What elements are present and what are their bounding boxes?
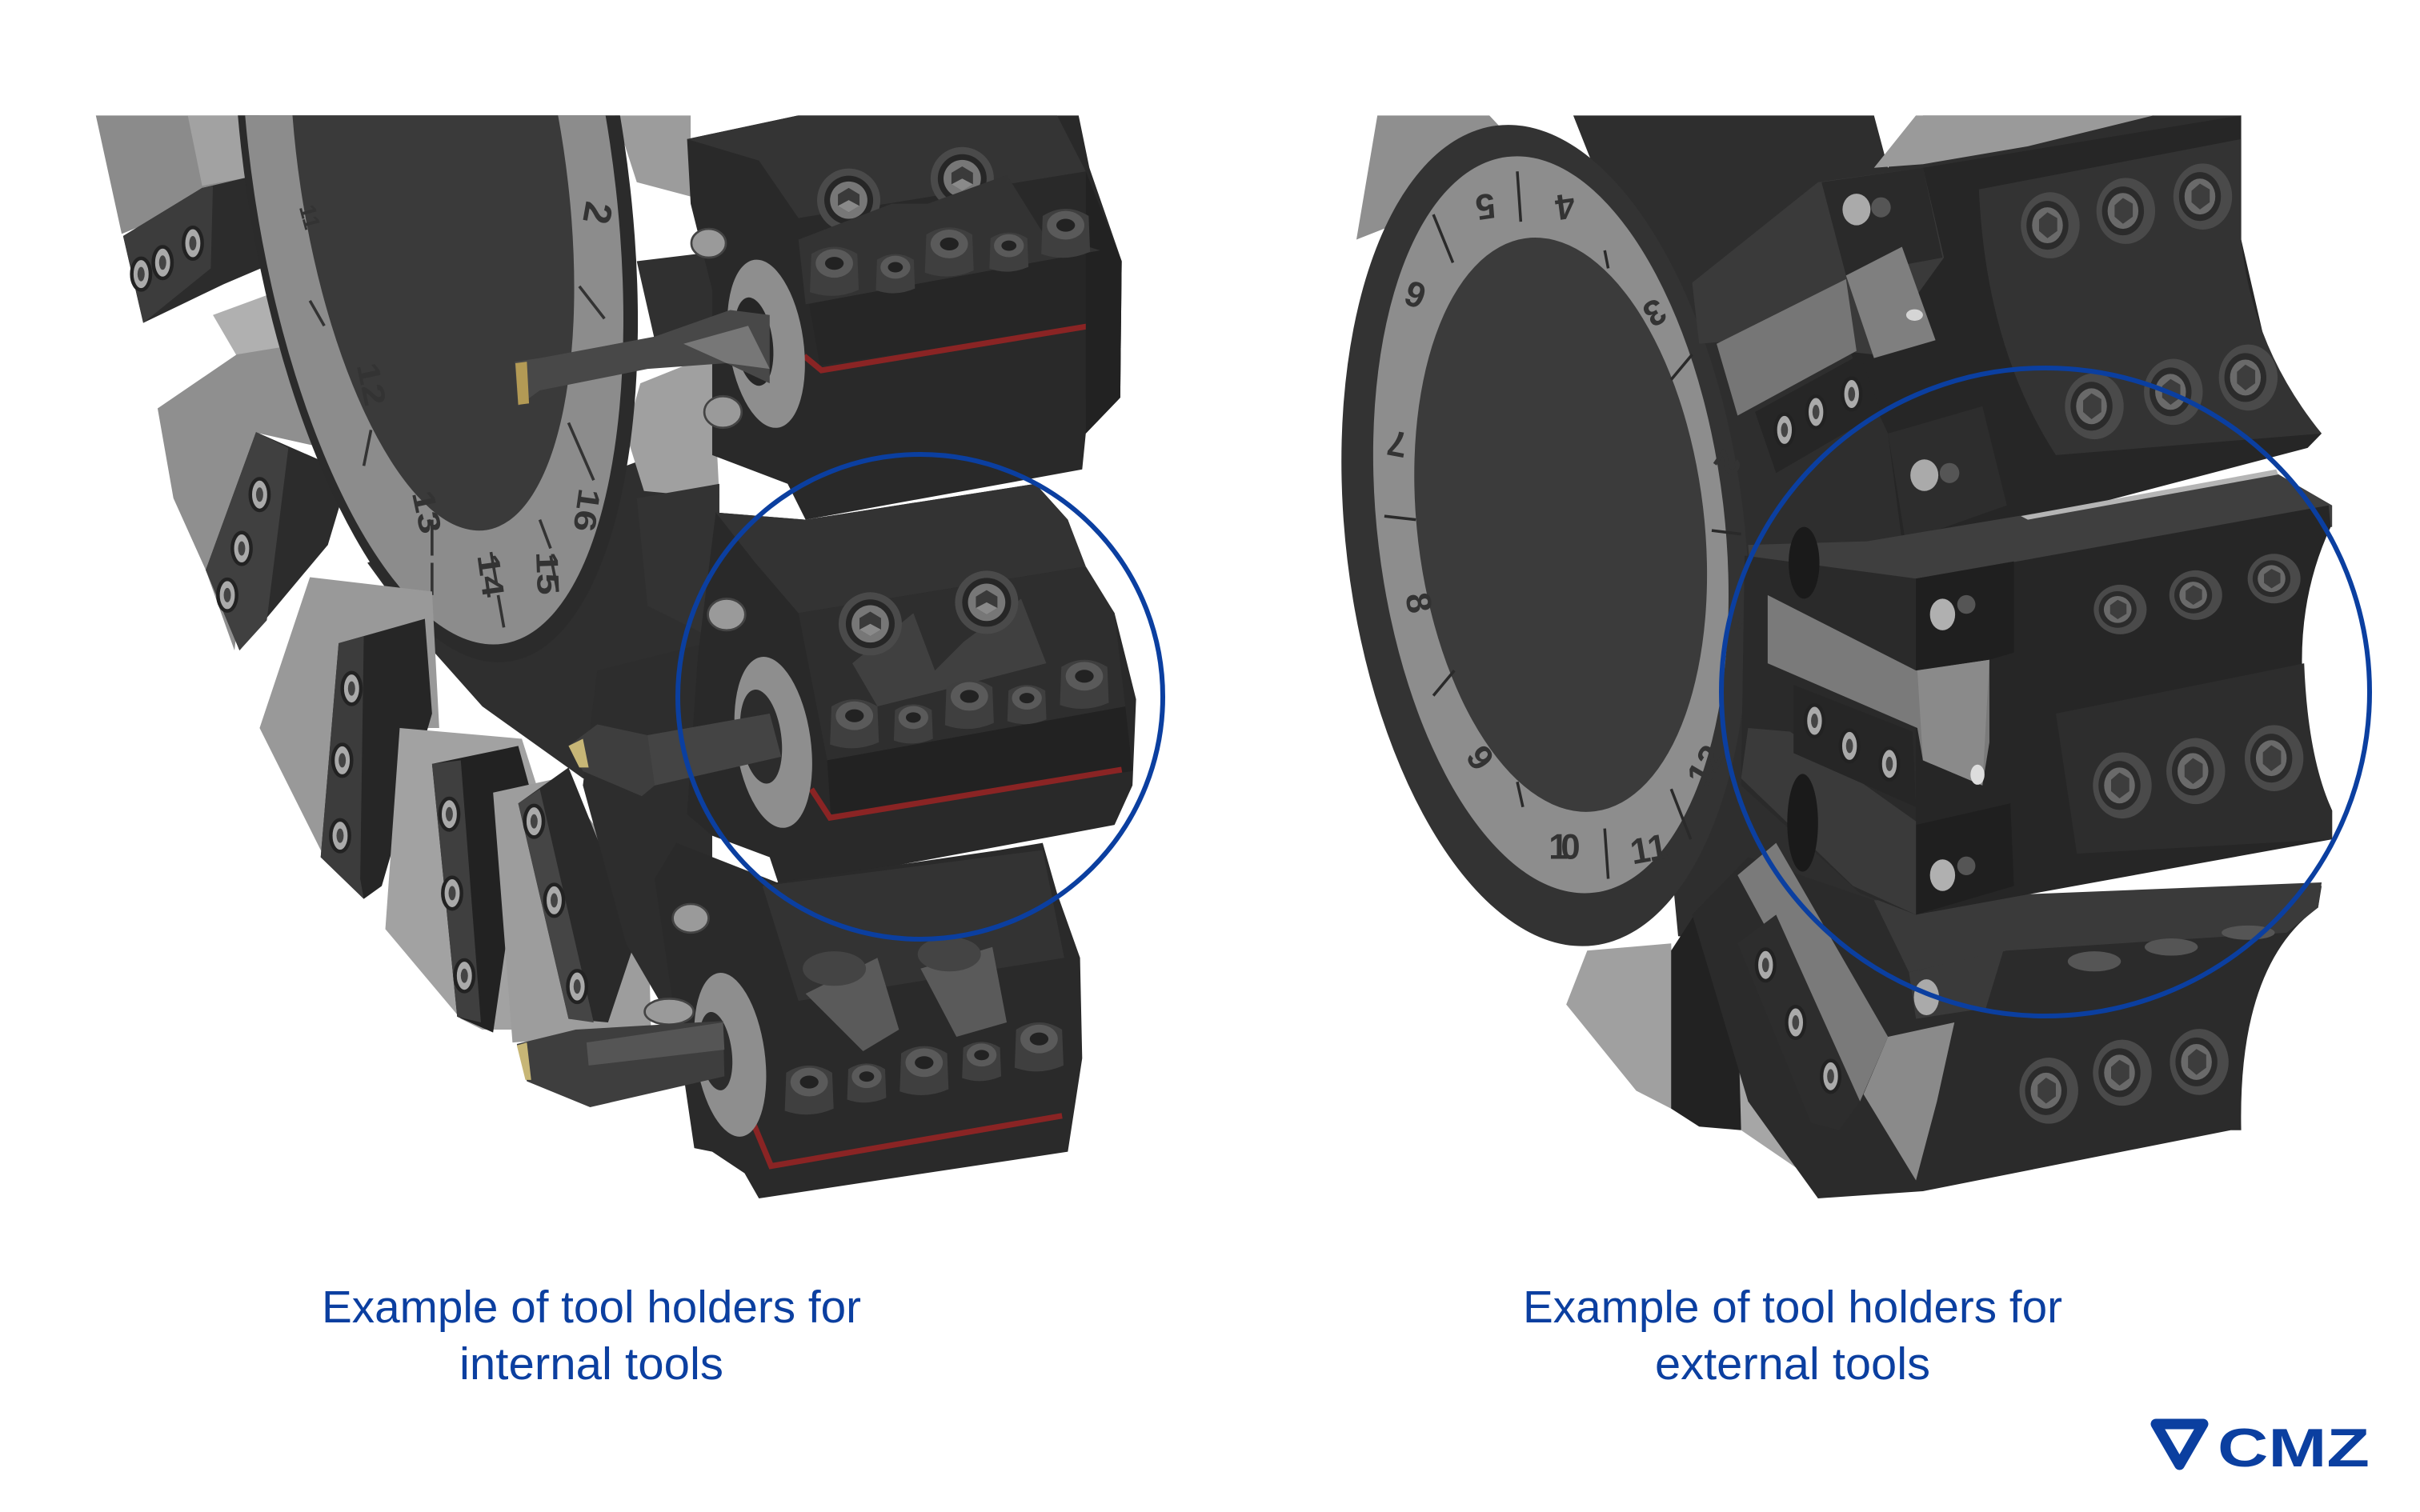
gray wedge middle [630, 364, 719, 493]
gray turret segment 4 [386, 728, 536, 1030]
ring tick marks [1384, 171, 1741, 878]
disc numbered ring [245, 115, 623, 645]
upper holder block [1818, 115, 2322, 542]
gray turret segment left [158, 347, 312, 650]
disc numbered ring [1335, 135, 1767, 914]
upper insert tool [1717, 247, 1936, 415]
gray turret segment 5 [493, 778, 651, 1042]
mount second [666, 483, 719, 581]
disc centre [293, 115, 575, 531]
disc outer edge [1298, 101, 1792, 970]
tool holder top [687, 115, 1122, 520]
ring number labels: 1 [1729, 607, 1772, 638]
upper holder curved plate [1979, 139, 2322, 455]
image: turret with tool holders for external tools [1298, 101, 2332, 1198]
highlight circle: external holder [1721, 368, 2370, 1016]
ring number labels: 5 [1473, 185, 1498, 227]
ring number labels: 11 [294, 202, 325, 232]
ring tick marks [310, 286, 604, 627]
lower tool block [1671, 918, 1741, 1130]
ring number labels: 4 [1553, 185, 1577, 227]
adjuster screws bottom [645, 904, 708, 1025]
caption: external tools: external tools [1655, 1338, 1930, 1390]
tool block top left [123, 178, 261, 323]
adjuster screw middle [708, 598, 745, 630]
highlight circle: internal holder [678, 454, 1163, 939]
ring number labels: 11 [1628, 826, 1670, 873]
ring number labels [294, 198, 620, 600]
gray segment highlight [187, 115, 245, 186]
ring number labels: 13 [405, 487, 448, 537]
ring number labels: 8 [1397, 590, 1439, 616]
caption: external tools: Example of tool holders for [1523, 1282, 2062, 1333]
gray segment behind disc [213, 295, 280, 355]
logo: CMZ: CMZ [2218, 1418, 2370, 1478]
ring number labels: 16 [567, 486, 607, 534]
gray turret behind disc [1356, 115, 1499, 240]
drill tool [515, 310, 770, 406]
caption: internal tools [322, 1282, 861, 1390]
ring number labels: 12 [350, 359, 393, 409]
ring number labels: 2 [574, 198, 620, 227]
tool holder middle [687, 484, 1136, 890]
tool holder bottom [655, 843, 1082, 1198]
ring number labels: 10 [1549, 827, 1581, 866]
gray turret segment top left [96, 115, 245, 234]
disc centre [1384, 220, 1737, 830]
upper tool seat [1755, 354, 2007, 542]
boring tool bottom [517, 1021, 724, 1107]
ring number labels: 14 [471, 552, 511, 600]
turret body top [1573, 115, 2242, 958]
ring number labels: 2 [1706, 443, 1749, 482]
gray wedge behind holders [615, 115, 691, 197]
tool block left [206, 432, 350, 650]
tool block 3 [321, 619, 432, 899]
gray turret segment 3 [259, 578, 439, 851]
logo: CMZ [2156, 1418, 2370, 1478]
ring number labels [1384, 185, 1772, 873]
tool block 4 [432, 746, 529, 1033]
ring number labels: 15 [529, 551, 565, 595]
disc outer edge [238, 115, 639, 562]
lower insert tool [1737, 843, 1954, 1181]
image: turret with tool holders for internal tools [96, 0, 1136, 1198]
adjuster screws top [691, 229, 742, 428]
ring number labels: 12 [1680, 738, 1733, 793]
ring number labels: 6 [1400, 272, 1431, 316]
upper clamp [1692, 168, 1944, 354]
mount upper [637, 254, 712, 337]
tool block 5 [519, 767, 637, 1022]
ring number labels: 7 [1384, 422, 1410, 465]
ring number labels: 9 [1458, 738, 1501, 778]
lower holder [1692, 858, 2322, 1198]
main holder body [1741, 470, 2332, 914]
gray segment top right [1874, 115, 2154, 168]
caption: external tools [1523, 1282, 2062, 1390]
boring tool middle [568, 714, 781, 796]
main insert tool [1768, 595, 1989, 807]
caption: internal tools: internal tools [459, 1338, 723, 1390]
lower gray segment [1566, 943, 1678, 1112]
ring number labels: 3 [1637, 290, 1673, 334]
turret central body dark band [367, 462, 701, 779]
caption: internal tools: Example of tool holders for [322, 1282, 861, 1333]
dark mount between holders [583, 778, 712, 999]
lower gray wedge [1740, 1072, 1796, 1168]
